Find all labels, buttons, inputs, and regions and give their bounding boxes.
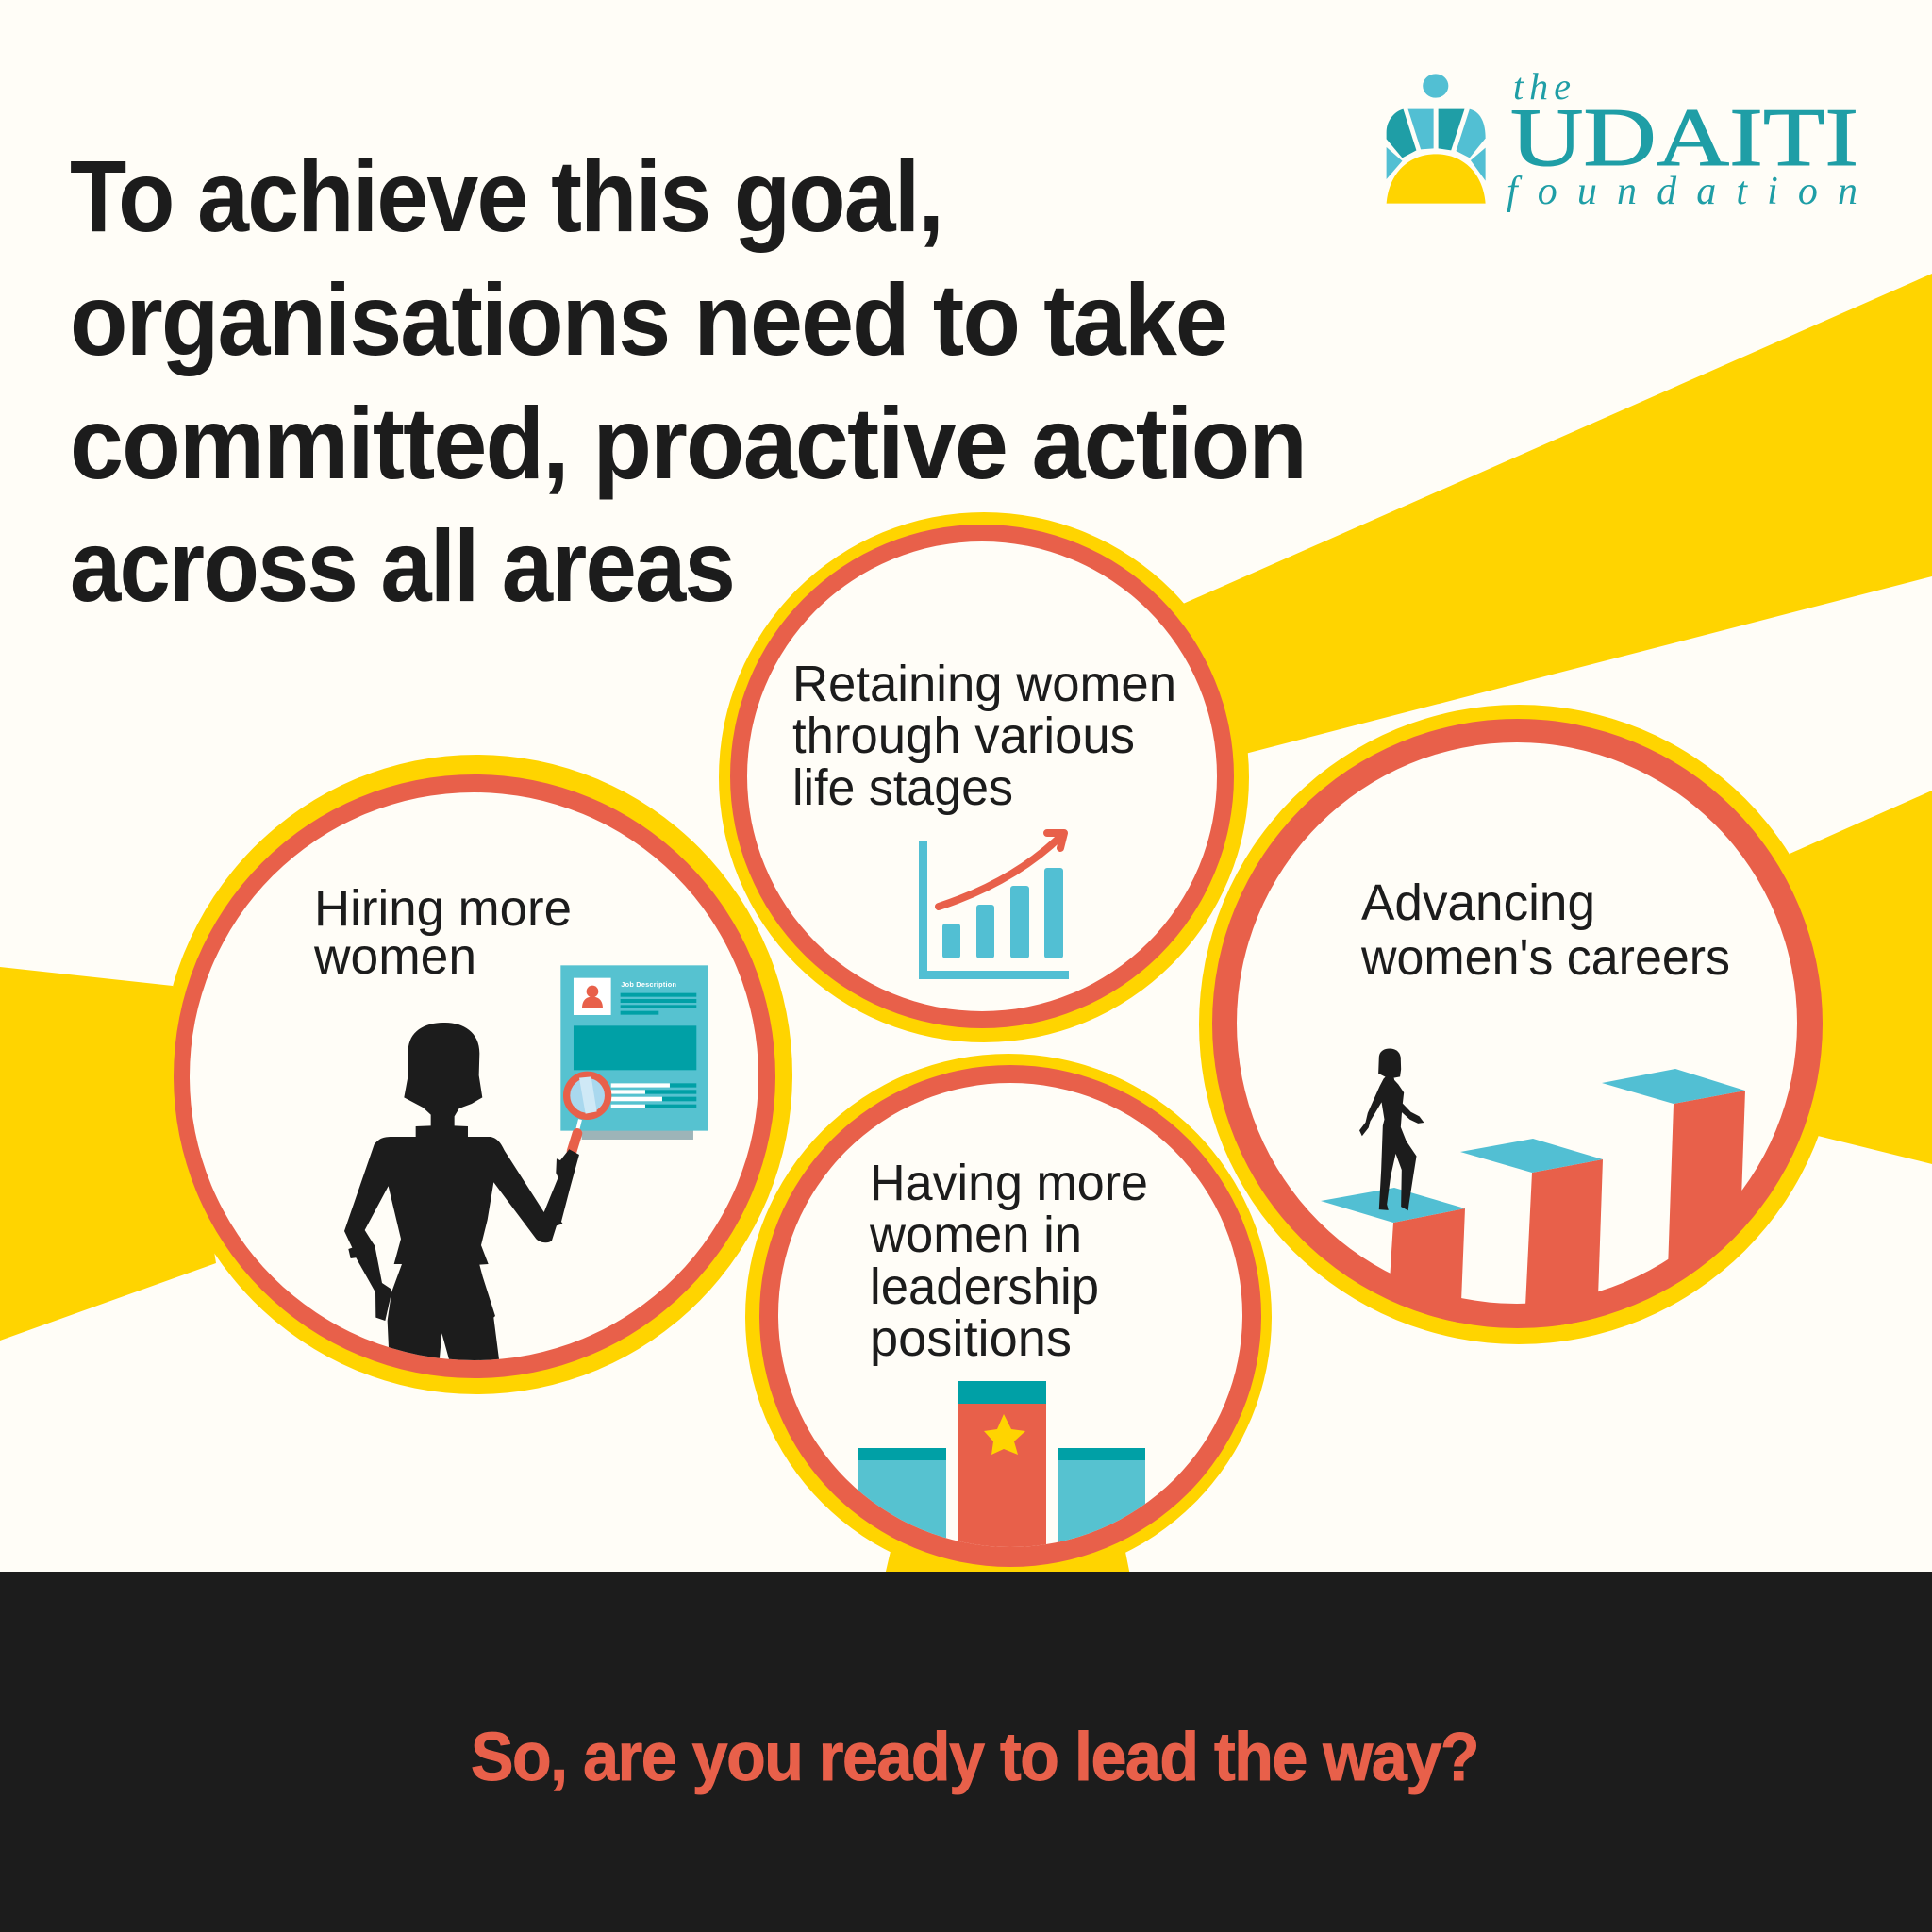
logo wordmark: UDAITI [1510, 92, 1858, 184]
logo: Udaiti Foundation [1387, 65, 1858, 213]
icon: woman silhouette holding magnifier [344, 1023, 608, 1361]
logo wordmark [1507, 65, 1858, 213]
logo icon [1387, 74, 1486, 204]
heading: organisations need to take [70, 262, 1226, 376]
call to action: So, are you ready to lead the way? [471, 1720, 1478, 1795]
heading [70, 139, 1306, 623]
icon: job description document: Job Description [621, 980, 676, 989]
footer band [0, 1572, 1932, 1932]
heading: across all areas [70, 508, 734, 623]
label: women in leadership: leadership [870, 1258, 1099, 1315]
label: retaining women: through various [792, 708, 1135, 764]
icon: staircase with walking woman [1321, 1049, 1745, 1325]
label: hiring more women [313, 880, 572, 985]
heading: committed, proactive action [70, 386, 1306, 500]
panel: retaining women [719, 512, 1249, 1042]
panel: hiring more women [160, 755, 792, 1394]
label: advancing women's careers: women's careers [1360, 929, 1730, 986]
label: women in leadership: positions [870, 1310, 1072, 1367]
icon: job description document [560, 965, 708, 1140]
logo wordmark: the [1513, 65, 1571, 108]
label: retaining women [792, 656, 1176, 816]
logo wordmark: foundation [1507, 170, 1857, 213]
icon: growth bar chart [919, 833, 1069, 979]
label: hiring more women: women [313, 928, 476, 985]
label: hiring more women: Hiring more [314, 880, 572, 937]
heading: To achieve this goal, [70, 139, 942, 253]
label: advancing women's careers: Advancing [1361, 874, 1595, 931]
label: women in leadership: women in [869, 1207, 1082, 1263]
label: retaining women: life stages [792, 759, 1013, 816]
label: women in leadership: Having more [870, 1155, 1148, 1211]
icon: leadership podium with star [858, 1381, 1145, 1547]
label: women in leadership [869, 1155, 1148, 1367]
label: advancing women's careers [1360, 874, 1730, 986]
yellow background bands [0, 274, 1932, 1575]
panel: women in leadership [745, 1054, 1272, 1580]
label: retaining women: Retaining women [792, 656, 1176, 712]
panel: advancing women's careers [1199, 705, 1839, 1344]
